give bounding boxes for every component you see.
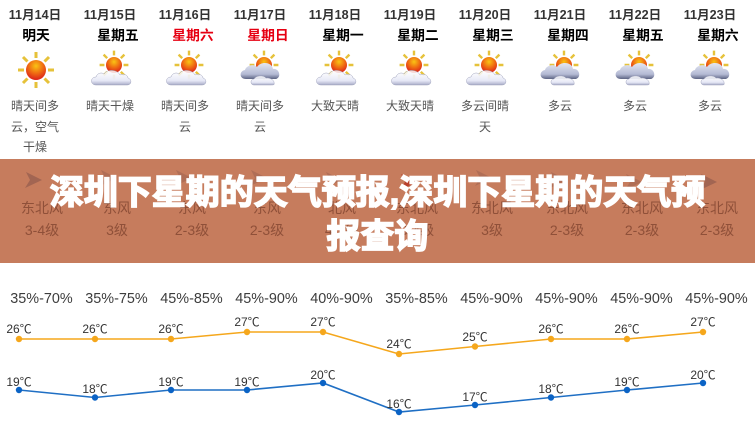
high temperature series	[6, 315, 716, 357]
weekday: Monday: 星期一	[322, 28, 364, 43]
low temperature series: 18℃	[82, 382, 108, 396]
description: Nov 14: 云，空气	[11, 120, 59, 134]
humidity: Nov 19: 35%-85%	[385, 291, 448, 307]
wind: Nov 15	[103, 200, 131, 238]
weekday: Thursday: 星期四	[547, 28, 589, 43]
wind: Nov 17: 东风	[253, 200, 281, 216]
description: Nov 16: 晴天间多	[161, 99, 209, 113]
description: Nov 16: 云	[179, 120, 191, 134]
description: Nov 23: 多云	[698, 99, 722, 113]
wind: Nov 14: 东北风	[21, 200, 63, 216]
wind: Nov 17	[250, 200, 284, 238]
wind: Nov 21: 东北风	[546, 200, 588, 216]
icon: cloudy, Nov 23	[691, 51, 729, 85]
wind: Nov 16: 2-3级	[175, 222, 209, 238]
humidity: Nov 17: 45%-90%	[235, 291, 298, 307]
humidity: Nov 14: 35%-70%	[10, 291, 73, 307]
description: Nov 18: 大致天晴	[311, 99, 359, 113]
high temperature series: 26℃	[6, 322, 32, 336]
description: Nov 19: 大致天晴	[386, 99, 434, 113]
wind: Nov 18	[325, 200, 359, 238]
date: Nov 17: 11月17日	[234, 8, 286, 22]
wind: Nov 16	[175, 200, 209, 238]
wind: Nov 16: 东风	[178, 200, 206, 216]
wind: Nov 23: 东北风	[696, 200, 738, 216]
weekday: Tuesday: 星期二	[397, 28, 439, 43]
wind: Nov 14	[21, 200, 63, 238]
high temperature series: 27℃	[234, 315, 260, 329]
description: Nov 14	[11, 99, 59, 154]
wind: Nov 17: 2-3级	[250, 222, 284, 238]
wind: Nov 21	[546, 200, 588, 238]
wind: Nov 19: 3-4级	[400, 222, 434, 238]
description: Nov 16	[161, 99, 209, 134]
humidity: Nov 22: 45%-90%	[610, 291, 673, 307]
wind: Nov 23: 2-3级	[700, 222, 734, 238]
wind: Nov 20	[471, 200, 513, 238]
description: Nov 14: 干燥	[23, 140, 47, 154]
low temperature series: 18℃	[538, 382, 564, 396]
weekday: Wednesday: 星期三	[472, 28, 514, 43]
icon: sunny with cloud, Nov 18	[316, 51, 356, 85]
wind: Nov 20: 3级	[481, 222, 503, 238]
wind: Nov 15: 3级	[106, 222, 128, 238]
humidity: Nov 20: 45%-90%	[460, 291, 523, 307]
low temperature series	[6, 368, 716, 415]
title: 深圳下星期的天气预报,深圳下星期的天气预	[50, 174, 705, 212]
wind: Nov 14: 3-4级	[25, 222, 59, 238]
low temperature series: 19℃	[234, 375, 260, 389]
date: Nov 15: 11月15日	[84, 8, 136, 22]
title: 报查询	[326, 218, 428, 256]
high temperature series: 26℃	[158, 322, 184, 336]
description: Nov 20: 多云间晴	[461, 99, 509, 113]
date: Nov 14: 11月14日	[9, 8, 61, 22]
weather icons	[18, 50, 730, 88]
description: Nov 17	[236, 99, 284, 134]
high temperature series: 26℃	[614, 322, 640, 336]
high temperature series: 24℃	[386, 337, 412, 351]
icon: sunny with cloud, Nov 15	[92, 51, 131, 85]
weekday: Friday: 星期五	[622, 28, 664, 43]
low temperature series: 19℃	[6, 375, 32, 389]
description: Nov 15: 晴天干燥	[86, 99, 134, 113]
wind: Nov 20: 东北风	[471, 200, 513, 216]
date: Nov 21: 11月21日	[534, 8, 586, 22]
low temperature series: 16℃	[386, 397, 412, 411]
humidity: Nov 21: 45%-90%	[535, 291, 598, 307]
description: Nov 17: 晴天间多	[236, 99, 284, 113]
description: Nov 21: 多云	[548, 99, 572, 113]
humidity: Nov 16: 45%-85%	[160, 291, 223, 307]
humidity: Nov 23: 45%-90%	[685, 291, 748, 307]
wind: Nov 23	[696, 200, 738, 238]
weekday: tomorrow: 明天	[22, 28, 50, 43]
date: Nov 19: 11月19日	[384, 8, 436, 22]
low temperature series: 19℃	[614, 375, 640, 389]
date: Nov 23: 11月23日	[684, 8, 736, 22]
icon: sunny with cloud, Nov 20	[466, 51, 506, 85]
wind: Nov 19: 东北风	[396, 200, 438, 216]
icon: cloudy, Nov 21	[541, 51, 579, 85]
icon: cloudy, Nov 22	[616, 51, 654, 85]
humidity: Nov 15: 35%-75%	[85, 291, 148, 307]
low temperature series: 19℃	[158, 375, 184, 389]
title	[50, 174, 706, 256]
weekday: Friday: 星期五	[97, 28, 139, 43]
wind: Nov 18: 北风	[328, 200, 356, 216]
description: Nov 14: 晴天间多	[11, 99, 59, 113]
high temperature series: 26℃	[82, 322, 108, 336]
high temperature series: 25℃	[462, 330, 488, 344]
description: Nov 22: 多云	[623, 99, 647, 113]
date: Nov 22: 11月22日	[609, 8, 661, 22]
wind: Nov 21: 2-3级	[550, 222, 584, 238]
weekday: Saturday: 星期六	[172, 28, 214, 43]
high temperature series: 27℃	[690, 315, 716, 329]
icon: sunny with cloud, Nov 19	[392, 51, 431, 85]
description: Nov 17: 云	[254, 120, 266, 134]
wind: Nov 22: 东北风	[621, 200, 663, 216]
low temperature series: 20℃	[310, 368, 336, 382]
date: Nov 18: 11月18日	[309, 8, 361, 22]
wind: Nov 19	[396, 200, 438, 238]
icon: cloudy, Nov 17	[241, 51, 279, 85]
weekday: Sunday: 星期日	[247, 28, 289, 43]
description: Nov 20	[461, 99, 509, 134]
humidity: Nov 18: 40%-90%	[310, 291, 373, 307]
title band	[0, 159, 755, 263]
date: Nov 20: 11月20日	[459, 8, 511, 22]
description: Nov 20: 天	[479, 120, 491, 134]
wind: Nov 22: 2-3级	[625, 222, 659, 238]
low temperature series: 17℃	[462, 390, 488, 404]
icon: sunny with cloud, Nov 16	[166, 51, 206, 85]
high temperature series: 26℃	[538, 322, 564, 336]
date: Nov 16: 11月16日	[159, 8, 211, 22]
wind: Nov 15: 东风	[103, 200, 131, 216]
weekday: Saturday: 星期六	[697, 28, 739, 43]
wind: Nov 18: 4-5级	[325, 222, 359, 238]
low temperature series: 20℃	[690, 368, 716, 382]
high temperature series: 27℃	[310, 315, 336, 329]
icon: sunny	[18, 52, 54, 88]
wind: Nov 22	[621, 200, 663, 238]
